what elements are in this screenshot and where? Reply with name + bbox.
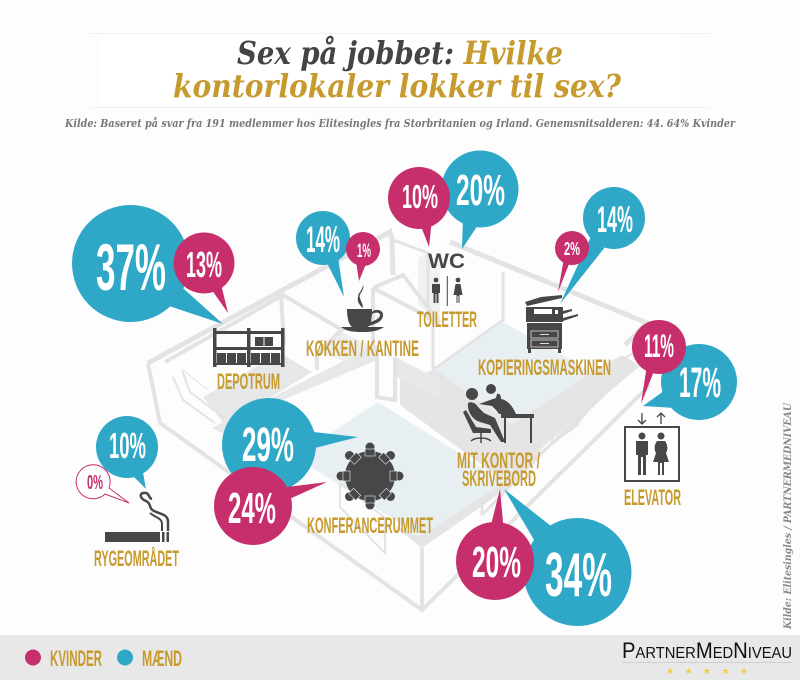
bubble: Toiletter women 10% <box>388 167 450 247</box>
bubble: Elevator men 17% <box>643 344 737 420</box>
bubble: Elevator men 17%: 17% <box>679 359 721 407</box>
bubble: Køkken men 14%: 14% <box>306 219 340 260</box>
bubble: Depotrum women 13% <box>174 232 234 313</box>
bubble: Depotrum women 13%: 13% <box>186 244 222 285</box>
label: Konferencerummet: KONFERANCERUMMET <box>307 513 433 538</box>
bubble: Konference men 29% <box>222 398 358 492</box>
bubble: Kontor men 34%: 34% <box>545 541 612 610</box>
floors <box>203 253 640 548</box>
logo <box>622 638 792 677</box>
logo: ★ <box>666 667 674 677</box>
icon: WC signs <box>428 250 465 306</box>
icon: coffee cup <box>341 285 384 332</box>
title: Sex på jobbet: Hvilke <box>237 34 563 72</box>
bubble: Ryge men 10% <box>96 416 158 489</box>
bubble: Køkken women 1% <box>346 232 380 281</box>
bubble: Kopiering women 2%: 2% <box>564 239 580 259</box>
logo: ★ <box>740 667 748 677</box>
bubble: Kopiering men 14%: 14% <box>597 199 633 240</box>
icon: elevator <box>625 413 679 481</box>
logo: ★ <box>684 667 693 677</box>
bubble: Toiletter women 10%: 10% <box>402 178 438 215</box>
logo: PARTNERMEDNIVEAU <box>622 638 792 663</box>
bubble: Toiletter men 20% <box>442 150 518 249</box>
legend: Kvinder: KVINDER <box>50 646 102 671</box>
bubble: Konference men 29%: 29% <box>242 419 294 472</box>
bubble: Konference women 24%: 24% <box>228 484 276 533</box>
legend: Mænd: MÆND <box>142 646 182 671</box>
floor plan <box>148 232 660 610</box>
icon: conference table <box>336 442 404 510</box>
walls <box>148 232 660 610</box>
bubble: Kontor women 20%: 20% <box>472 538 521 587</box>
bubble: Ryge men 10%: 10% <box>109 425 146 466</box>
title <box>173 34 621 105</box>
bubble: Køkken women 1%: 1% <box>357 241 371 262</box>
label: Depotrum: DEPOTRUM <box>217 369 280 394</box>
vertical credit: Kilde: Elitesingles / PARTNERMEDNIVEAU <box>782 402 794 630</box>
label: Kopieringsmaskinen: KOPIERINGSMASKINEN <box>478 355 611 380</box>
logo: ★ <box>703 667 711 677</box>
bubble: Kontor men 34% <box>504 489 632 626</box>
bubble: Kopiering women 2% <box>555 231 589 292</box>
bubble: Konference women 24% <box>214 467 327 545</box>
text: ELEVATOR <box>624 485 681 510</box>
text: RYGEOMRÅDET <box>94 545 179 571</box>
label: Køkken / Kantine: KØKKEN / KANTINE <box>306 336 419 361</box>
icon: WC signs: WC <box>428 250 465 273</box>
logo: ★ <box>721 667 730 677</box>
bubble: Kopiering men 14% <box>560 187 645 304</box>
bubble: Ryge women 0%: 0% <box>87 472 103 494</box>
label: Mit kontor / skrivebord: SKRIVEBORD <box>462 466 536 491</box>
icon: couple at desk <box>463 384 534 443</box>
icon: cigarette <box>105 493 169 542</box>
title panel <box>90 33 710 108</box>
bubble: Elevator women 11%: 11% <box>644 328 674 364</box>
bubble: Elevator women 11% <box>632 320 686 404</box>
icon: shelf <box>213 328 284 367</box>
label: Mit kontor / skrivebord: MIT KONTOR / <box>457 448 540 473</box>
legend: Kvinder <box>25 646 102 671</box>
bubble: Depotrum men 37% <box>72 205 223 324</box>
icon: copier <box>525 295 578 353</box>
legend: Mænd <box>117 646 182 671</box>
bubble: Depotrum men 37%: 37% <box>96 230 166 304</box>
bubble: Toiletter men 20%: 20% <box>456 166 505 215</box>
footer bar <box>0 635 800 680</box>
title: kontorlokaler lokker til sex? <box>173 67 621 105</box>
bubble: Ryge women 0% <box>76 465 129 503</box>
text: TOILETTER <box>417 307 477 332</box>
bubble: Kontor women 20% <box>456 489 534 600</box>
bubble: Køkken men 14% <box>296 211 350 297</box>
label: Mit kontor / skrivebord <box>457 448 540 491</box>
